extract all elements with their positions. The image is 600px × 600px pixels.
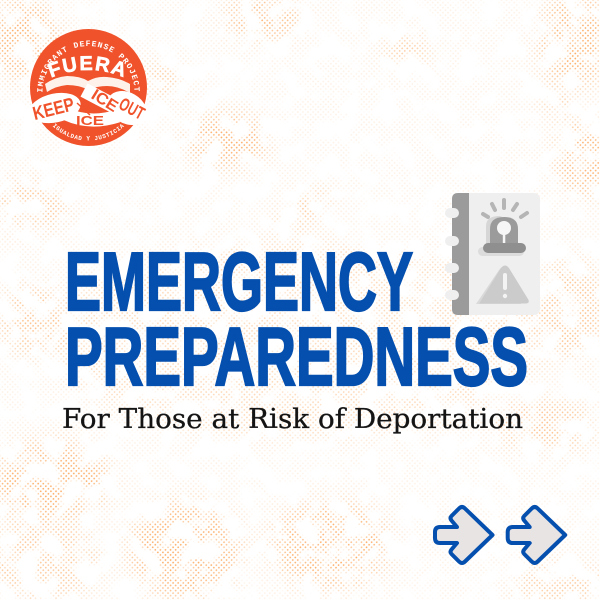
notebook rings [445,208,459,300]
logo word: Keep: KEEP [31,94,77,125]
logo word: Fuera: FUERA [47,56,124,78]
logo word: lower Ice: ICE [76,113,104,128]
title [65,235,528,403]
arrow 2 [508,507,565,563]
logo figure-eight band [27,84,153,132]
logo word: Out: OUT [116,94,148,124]
logo ring text bottom: IGUALDAD Y JUSTICIA [52,123,124,140]
logo crossing arms [45,76,130,93]
logo word: Ice: ICE [88,87,121,116]
icon: emergency notebook [445,193,540,315]
title line 1: EMERGENCY [65,235,413,328]
subtitle: For Those at Risk of Deportation [62,404,523,435]
logo ring text top: IMMIGRANT DEFENSE PROJECT [37,40,140,92]
siren [478,200,527,256]
arrow 1 [435,507,492,563]
logo: Immigrant Defense Project badge [30,29,148,146]
warning triangle [476,266,528,304]
